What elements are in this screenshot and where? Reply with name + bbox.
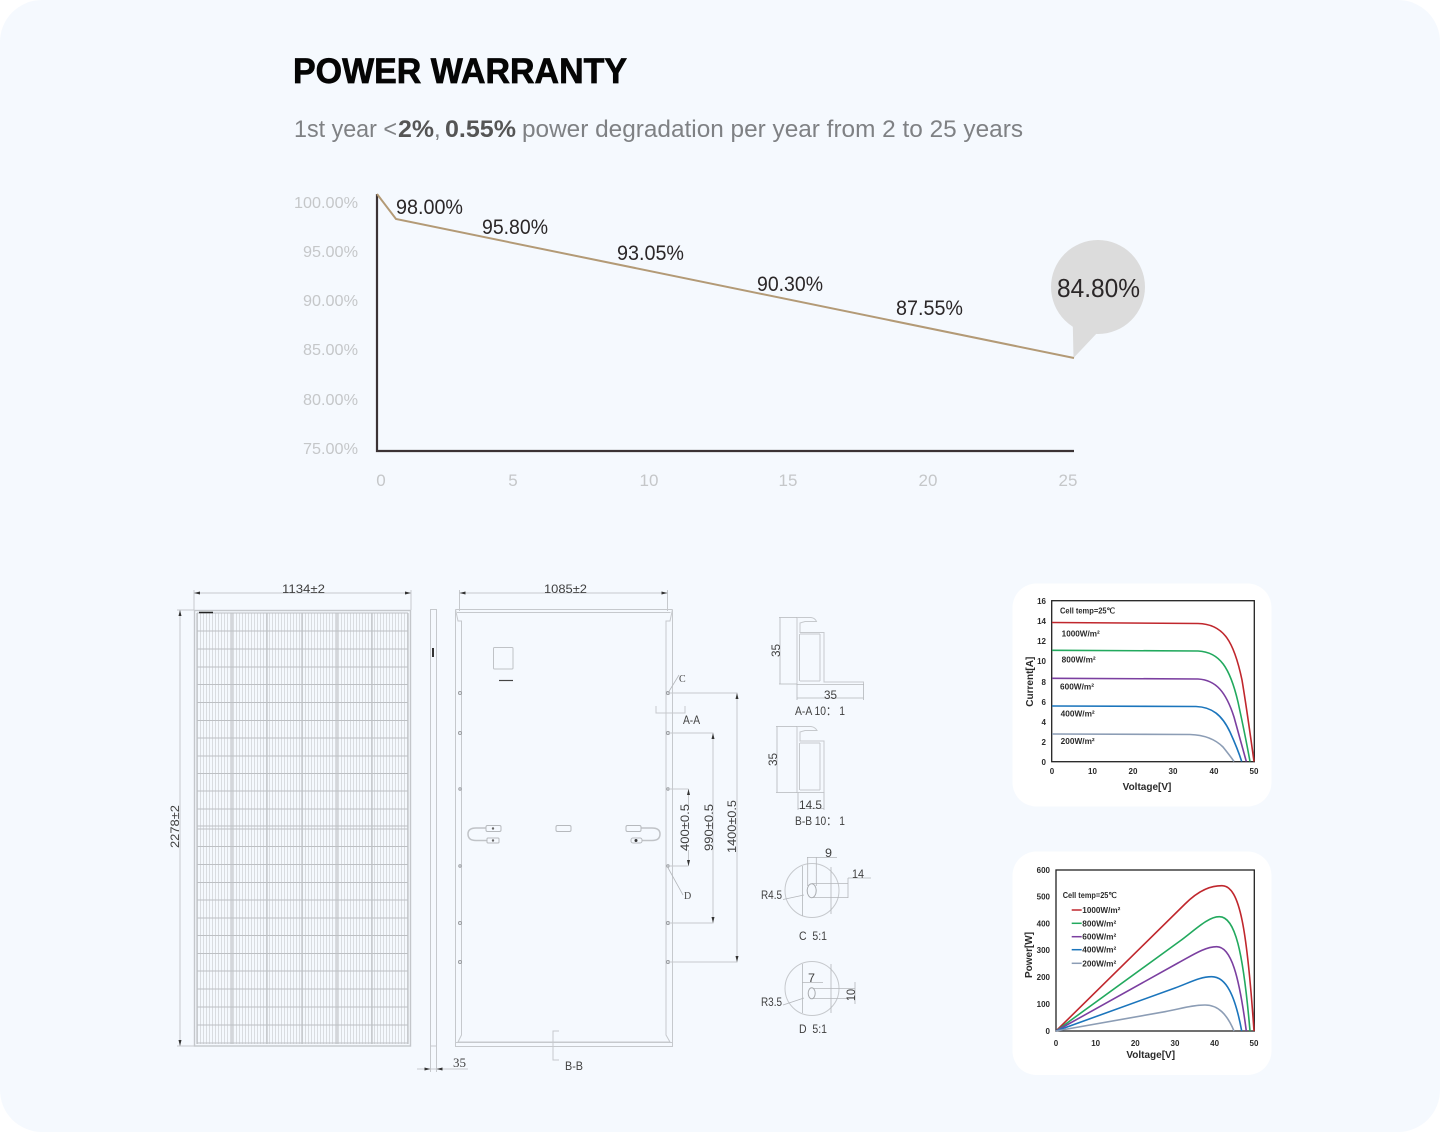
y axis labels: 85.00% [303,342,358,359]
dimension lines: 1400±0.5 [725,800,739,853]
y ticks: 10 [1037,657,1047,666]
card: power vs voltage chart [1012,852,1272,1075]
subtitle: 1st year < [294,116,397,143]
x ticks: 0 [1054,1039,1059,1048]
y ticks: 300 [1037,946,1051,955]
detail D: D 5:1 [799,1022,827,1036]
y ticks: 0 [1042,758,1047,767]
detail C: 9 [825,846,832,860]
subtitle: 2% [398,116,434,143]
series labels: Cell temp=25℃ [1060,606,1115,616]
callout D [667,866,691,902]
plot frame [1052,601,1254,762]
x axis labels: 0 [376,471,386,490]
axis titles: Voltage[V] [1123,782,1171,793]
y axis labels: 80.00% [303,392,358,409]
data labels: 87.55% [896,297,963,320]
series labels [1060,606,1115,746]
dimension lines: 400±0.5 [678,804,692,851]
section marker B-B: B-B [565,1059,583,1073]
legend [1063,891,1121,968]
y ticks: 500 [1037,892,1051,902]
y ticks: 400 [1037,920,1051,928]
section B-B profile: 14.5 [799,798,822,812]
y axis labels: 75.00% [303,441,358,458]
I-V curves [1052,622,1254,762]
x axis labels: 15 [779,471,797,490]
y ticks: 100 [1037,1000,1051,1009]
back view drawing [456,582,739,1073]
warranty line chart [294,194,1145,490]
detail D: R3.5 [761,995,782,1009]
width dimension 1134: 1134±2 [282,582,325,596]
callout D: D [684,891,691,902]
x axis labels: 25 [1059,471,1077,490]
section A-A profile: 35 [769,644,783,657]
detail D: 10 [844,989,858,1001]
plot frame [1056,870,1254,1031]
x axis labels: 20 [919,471,937,490]
x ticks [1050,767,1259,776]
data labels: 90.30% [757,273,823,296]
y ticks: 200 [1037,973,1051,982]
dimension lines [668,693,739,962]
x axis labels: 10 [640,471,658,490]
y ticks: 8 [1042,678,1047,687]
mounting holes [458,692,670,964]
callout bubble: 84.80%: 84.80% [1057,273,1140,303]
subtitle: power degradation per year from 2 to 25 years [522,116,1023,143]
card: current vs voltage chart [1012,584,1272,806]
subtitle: , [434,116,441,143]
y ticks: 12 [1037,637,1047,646]
section B-B profile [766,726,845,828]
subtitle: 0.55% [445,116,516,143]
legend: 800W/m² [1082,919,1117,928]
axis titles: Current[A] [1025,657,1036,707]
y ticks: 6 [1042,698,1047,707]
x ticks: 50 [1250,767,1259,776]
y ticks: 0 [1046,1027,1051,1036]
y ticks [1037,597,1047,767]
x axis labels: 5 [508,471,518,490]
section A-A profile: 35 [824,688,837,702]
series labels: 1000W/m² [1062,630,1100,639]
x ticks: 10 [1088,767,1097,776]
y axis labels [294,195,358,458]
legend: 600W/m² [1082,933,1117,942]
callout C [668,674,686,693]
data labels: 95.80% [482,216,548,239]
y axis labels: 95.00% [303,244,358,261]
section A-A profile [769,618,864,718]
x ticks: 10 [1091,1039,1101,1048]
y ticks: 16 [1037,597,1047,606]
x ticks: 40 [1210,1039,1220,1048]
detail C: 14 [852,867,864,881]
y axis labels: 100.00% [294,195,358,212]
junction boxes and cables [468,826,660,843]
section B-B profile: B-B 10： 1 [795,814,845,828]
front view drawing [168,582,411,1046]
series labels: 800W/m² [1062,656,1096,664]
legend: 200W/m² [1082,959,1117,968]
legend: 400W/m² [1082,946,1117,955]
axis titles: Voltage[V] [1126,1050,1175,1061]
series labels: 400W/m² [1061,710,1095,719]
x ticks: 30 [1169,767,1178,776]
section A-A profile: A-A 10： 1 [795,704,845,718]
width dimension 1134 [194,582,411,610]
height dimension 2278: 2278±2 [168,805,182,848]
detail D [761,962,858,1036]
section B-B profile: 35 [766,753,780,766]
solar panel front [194,610,410,1046]
chart axes [377,194,1074,451]
dimension lines: 990±0.5 [702,804,716,851]
legend: Cell temp=25℃ [1063,891,1117,900]
y axis labels: 90.00% [303,293,358,310]
x axis labels [376,471,1077,490]
axis titles [1024,932,1175,1061]
height dimension 2278 [168,610,194,1046]
title: POWER WARRANTY [293,52,627,91]
y ticks: 600 [1037,866,1051,875]
series labels: 600W/m² [1060,682,1094,692]
y ticks: 2 [1042,738,1047,747]
degradation line [377,194,1074,358]
x ticks: 20 [1131,1039,1140,1048]
x ticks: 50 [1250,1039,1259,1048]
x ticks: 40 [1210,767,1219,776]
x ticks: 0 [1050,767,1055,776]
y ticks: 14 [1037,617,1047,626]
axis titles: Power[W] [1024,932,1035,978]
detail D: 7 [808,971,815,985]
x ticks: 30 [1171,1039,1180,1048]
y ticks: 4 [1042,718,1047,727]
section marker A-A [656,706,700,727]
axis titles [1025,657,1171,793]
detail C [761,846,871,943]
panel frame [456,610,672,1046]
y ticks [1037,866,1051,1036]
data labels [396,196,963,320]
detail C: R4.5 [761,888,782,902]
callout bubble: 84.80% [1051,240,1145,358]
data labels: 93.05% [617,242,684,265]
section marker B-B [553,1031,583,1073]
legend: 1000W/m² [1082,906,1121,915]
callout C: C [679,674,686,685]
width dimension 1085 [460,582,668,611]
P-V curves [1056,886,1254,1031]
detail C: C 5:1 [799,929,827,943]
label box [494,648,513,680]
x ticks [1054,1039,1259,1048]
side view drawing: 35 [453,1055,466,1070]
series labels: 200W/m² [1061,737,1095,746]
x ticks: 20 [1129,767,1138,776]
side view drawing [417,610,468,1072]
data labels: 98.00% [396,196,463,219]
section marker A-A: A-A [683,713,700,727]
width dimension 1085: 1085±2 [544,582,587,596]
